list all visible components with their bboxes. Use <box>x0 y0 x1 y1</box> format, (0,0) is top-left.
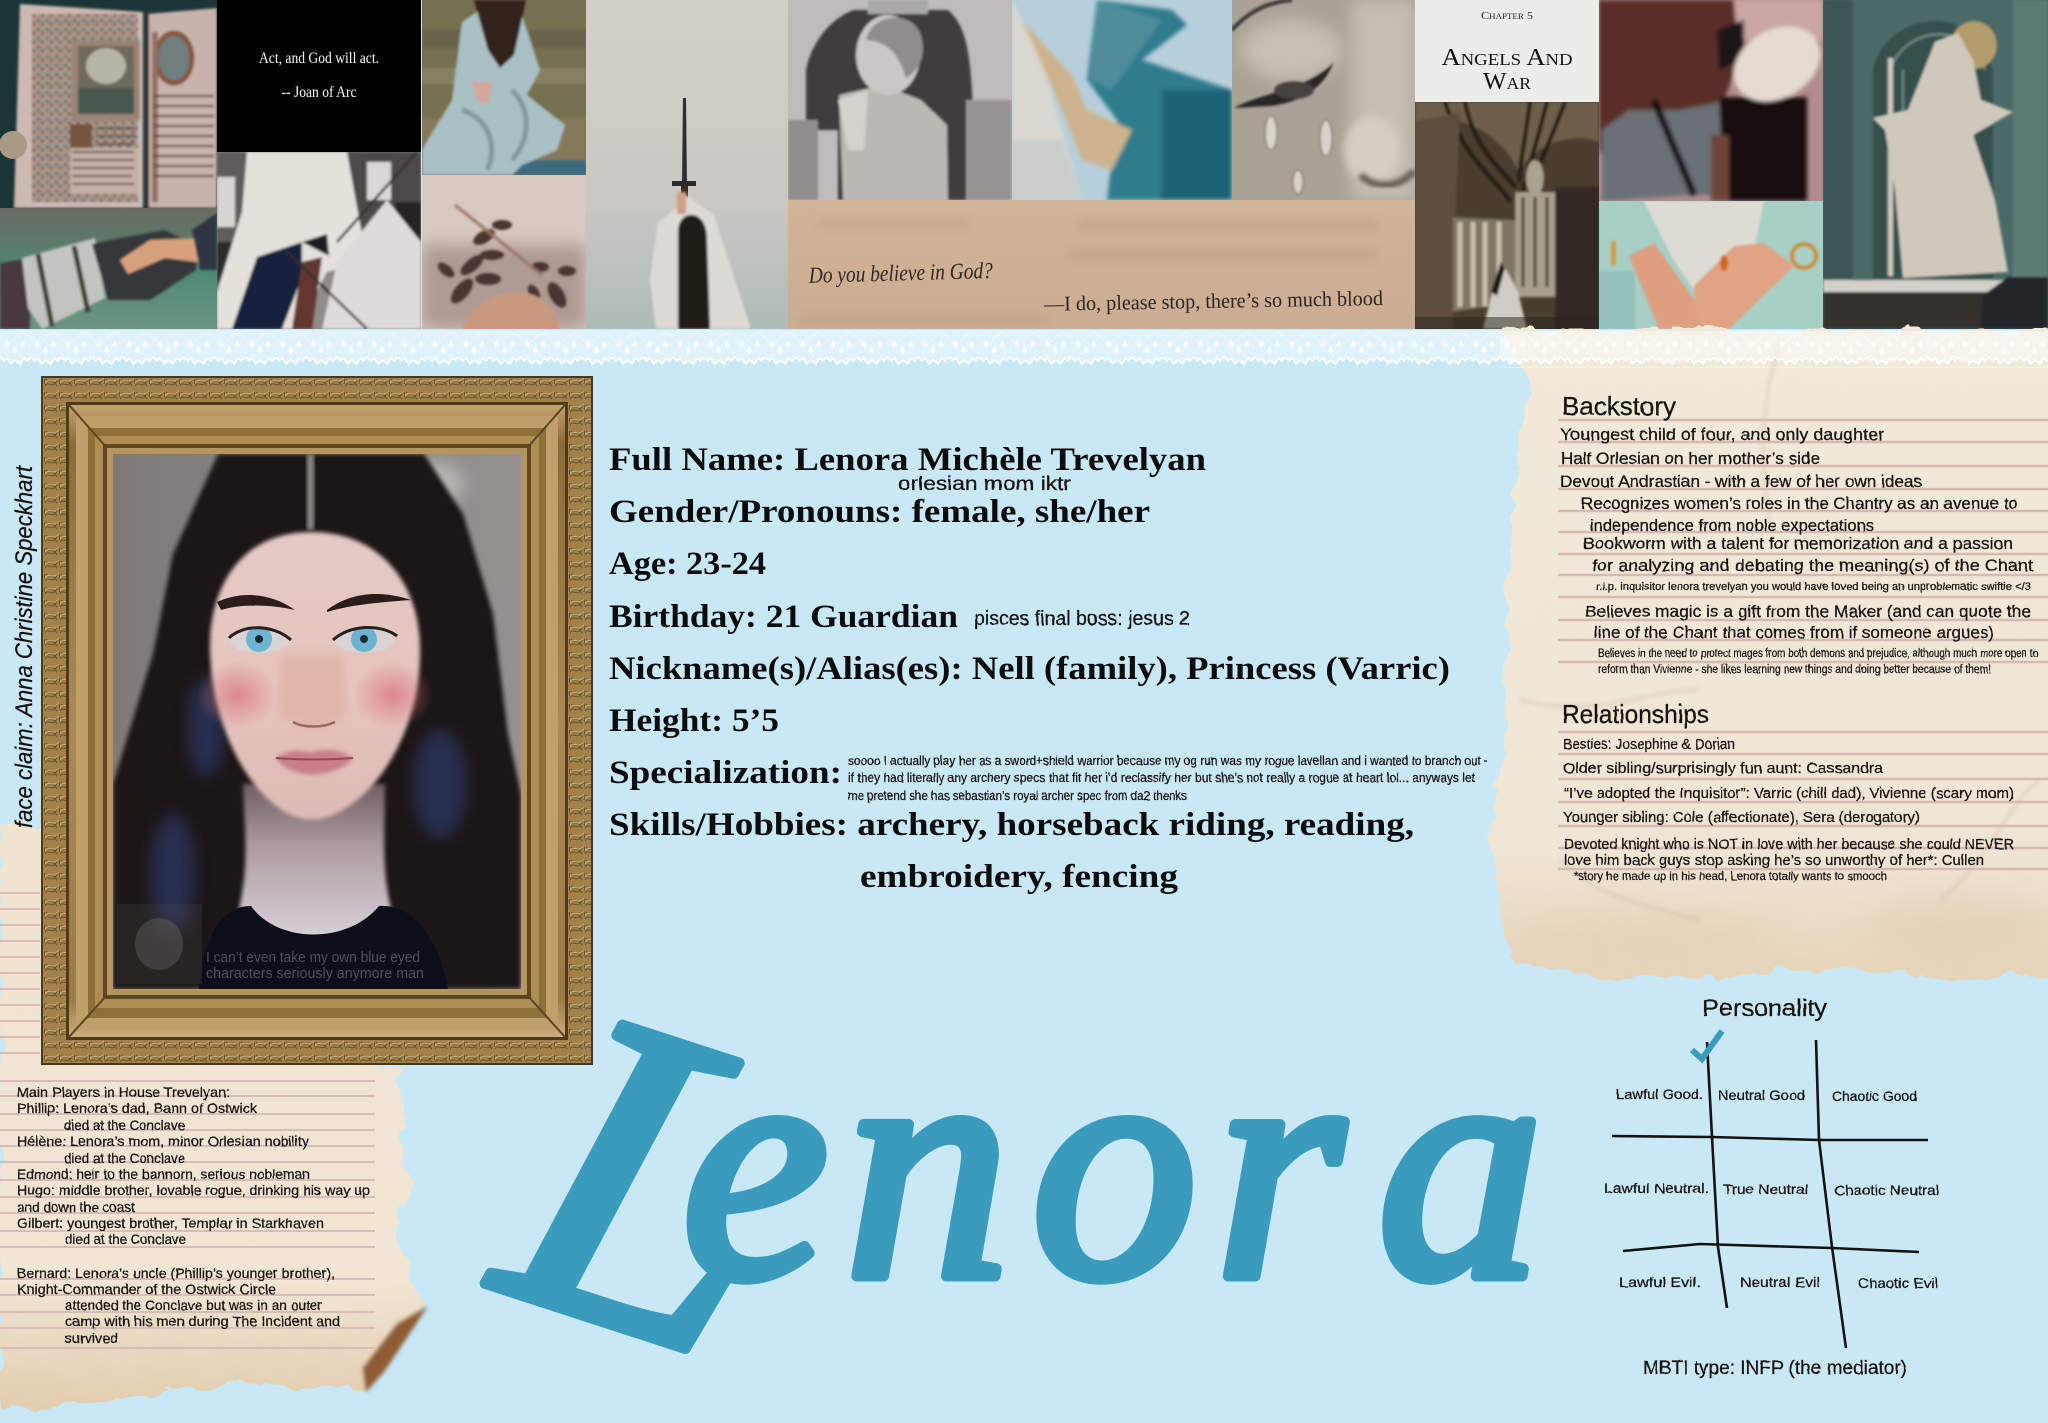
image: embroidery close-up <box>422 175 586 329</box>
image: black quote card <box>217 0 421 152</box>
text block: backstory lines <box>1560 425 2038 676</box>
side notes: soooo I actually play her as a sword+shield warrior because my og run was my rogue lavellan and i wanted to branch out - <box>848 753 1488 768</box>
text block: relationships lines: *story he made up in his head, Lenora totally wants to smooch <box>1574 869 1887 883</box>
text block: character details: Nickname(s)/Alias(es): Nell (family), Princess (Varric) <box>609 651 1450 687</box>
image: rider on white horse <box>217 152 421 329</box>
image: weeping face <box>1232 0 1415 200</box>
text block: backstory lines: Devout Andrastian - with a few of her own ideas <box>1560 472 1922 491</box>
alignment labels: Lawful Evil. <box>1619 1274 1701 1290</box>
text block: main players in House Trevelyan: died at the Conclave <box>64 1117 185 1133</box>
text block: character details: Height: 5’5 <box>609 703 779 739</box>
image: praying stone statue <box>788 0 1012 200</box>
text block: character details: Specialization: <box>609 755 842 791</box>
text block: main players in House Trevelyan <box>17 1084 370 1346</box>
side notes: if they had literally any archery specs that fit her i’d reclassify her but she’s not really a rogue at heart lol... anyways let <box>848 770 1475 785</box>
image: chapter title page: Chapter 5 <box>1481 10 1534 22</box>
portrait in gold frame <box>41 376 593 1065</box>
text block: main players in House Trevelyan: Gilbert: youngest brother, Templar in Starkhaven <box>17 1215 324 1231</box>
text block: backstory lines: Youngest child of four, and only daughter <box>1560 425 1884 444</box>
side notes: me pretend she has sebastian’s royal archer spec from da2 thenks <box>848 788 1187 803</box>
image: archer back view <box>1599 0 1823 201</box>
text block: relationships lines: Younger sibling: Cole (affectionate), Sera (derogatory) <box>1563 809 1920 826</box>
side notes <box>848 474 1488 803</box>
panel: backstory and relationships paper <box>1489 331 2048 980</box>
alignment labels: Chaotic Evil <box>1858 1275 1938 1291</box>
title: Lenora: enora <box>682 983 1543 1348</box>
moodboard collage <box>0 0 2048 392</box>
alignment labels: Chaotic Good <box>1832 1088 1917 1104</box>
text block: main players in House Trevelyan: Phillip: Lenora’s dad, Bann of Ostwick <box>17 1100 258 1116</box>
icon: check mark <box>1692 1031 1722 1059</box>
text block: character details: Birthday: 21 Guardian <box>609 599 958 635</box>
text block: main players in House Trevelyan: Knight-Commander of the Ostwick Circle <box>17 1281 276 1297</box>
alignment labels: True Neutral <box>1723 1181 1808 1197</box>
text block: character details: Gender/Pronouns: female, she/her <box>609 494 1150 530</box>
image: illuminated book <box>0 0 217 208</box>
text block: backstory lines: Bookworm with a talent for memorization and a passion <box>1583 534 2013 553</box>
text block: character details: embroidery, fencing <box>860 859 1179 895</box>
text block: character details: Age: 23-24 <box>609 546 766 582</box>
side notes: pisces final boss: jesus 2 <box>974 608 1190 630</box>
image: book page quote: —I do, please stop, there’s so much blood <box>1043 286 1384 316</box>
image: chapter title page: War <box>1483 69 1532 95</box>
image: black quote card: -- Joan of Arc <box>282 84 357 101</box>
text block: backstory lines: independence from noble expectations <box>1590 516 1874 535</box>
text block: main players in House Trevelyan: attended the Conclave but was in an outer <box>65 1297 322 1313</box>
text block: main players in House Trevelyan: died at the Conclave <box>64 1150 185 1166</box>
text block: backstory lines: for analyzing and debating the meaning(s) of the Chant <box>1592 556 2033 575</box>
alignment labels: Neutral Good <box>1718 1087 1805 1103</box>
alignment labels: Chaotic Neutral <box>1834 1182 1939 1198</box>
photo: dark-haired woman with blue eyes <box>113 454 521 989</box>
text block: backstory lines: Half Orlesian on her mother’s side <box>1561 449 1820 468</box>
image: chapter title page: Angels And <box>1442 45 1572 71</box>
alignment labels <box>1604 1086 1939 1291</box>
lace trim <box>0 330 2048 367</box>
photo: dark-haired woman with blue eyes: characters seriously anymore man <box>206 965 424 982</box>
text block: backstory lines: line of the Chant that comes from if someone argues) <box>1594 623 1994 642</box>
text block: main players in House Trevelyan: Edmond: heir to the bannorn, serious nobleman <box>17 1166 310 1182</box>
text block: main players in House Trevelyan: Hugo: middle brother, lovable rogue, drinking his way up <box>17 1182 370 1198</box>
gold frame <box>41 376 593 1065</box>
text block: main players in House Trevelyan: Hélène: Lenora’s mom, minor Orlesian nobility <box>17 1133 309 1149</box>
image: hands with rings <box>1599 201 1823 329</box>
image: white veiled statue <box>1823 0 2048 329</box>
alignment labels: Neutral Evil <box>1740 1274 1820 1290</box>
image: chapter title page <box>1415 0 1599 102</box>
text block: relationships lines: “I’ve adopted the Inquisitor”: Varric (chill dad), Vivienne (scary mom) <box>1564 785 2014 802</box>
text block: relationships lines: Devoted knight who is NOT in love with her because she could NEVER <box>1564 836 2014 853</box>
text block: main players in House Trevelyan: camp with his men during The Incident and <box>65 1313 340 1329</box>
image: seated woman in pale dress <box>422 0 586 175</box>
text block: relationships lines: Besties: Josephine & Dorian <box>1563 736 1735 753</box>
panel: main players paper <box>0 826 428 1408</box>
text block: backstory lines: Recognizes women’s roles in the Chantry as an avenue to <box>1581 494 2018 513</box>
alignment labels: Lawful Good. <box>1616 1086 1703 1102</box>
image: book page quote: Do you believe in God? <box>808 258 994 288</box>
text block: main players in House Trevelyan: Bernard: Lenora’s uncle (Phillip’s younger brother), <box>17 1265 335 1281</box>
alignment labels: Lawful Neutral. <box>1604 1180 1709 1196</box>
heading: Relationships: Relationships <box>1562 699 1709 729</box>
text block: main players in House Trevelyan: Main Players in House Trevelyan: <box>17 1084 230 1100</box>
grid lines <box>1612 1040 1928 1348</box>
image: gloved hands <box>0 208 217 329</box>
text block: main players in House Trevelyan: died at the Conclave <box>65 1231 186 1247</box>
side notes: orlesian mom iktr <box>898 474 1072 495</box>
text block: backstory lines: reform than Vivienne - she likes learning new things and doing better because of them! <box>1598 664 1991 676</box>
text block: main players in House Trevelyan: and down the coast <box>17 1199 135 1215</box>
photo: dark-haired woman with blue eyes: I can’t even take my own blue eyed <box>206 949 420 966</box>
text block: relationships lines <box>1563 736 2014 883</box>
text block: relationships lines: Older sibling/surprisingly fun aunt: Cassandra <box>1563 760 1884 777</box>
text block: backstory lines: r.i.p. inquisitor lenora trevelyan you would have loved being an unproblematic swiftie </3 <box>1596 581 2031 593</box>
image: book page quote <box>788 200 1415 329</box>
image: rider in teal dress <box>1012 0 1232 200</box>
text block: character details: Full Name: Lenora Michèle Trevelyan <box>609 442 1206 478</box>
panel: personality alignment chart <box>1604 995 1939 1379</box>
image: black quote card: Act, and God will act. <box>259 50 379 67</box>
caption: face claim: face claim: Anna Christine Speckhart <box>11 465 38 828</box>
heading: Personality: Personality <box>1702 995 1827 1022</box>
text block: main players in House Trevelyan: survived <box>65 1330 118 1346</box>
image: raised sword <box>586 0 788 329</box>
text block: character details <box>609 442 1450 895</box>
text block: character details: Skills/Hobbies: archery, horseback riding, reading, <box>609 807 1414 843</box>
text block: backstory lines: Believes magic is a gift from the Maker (and can quote the <box>1585 602 2031 621</box>
text: MBTI type: MBTI type: INFP (the mediator) <box>1643 1358 1907 1379</box>
text block: relationships lines: love him back guys stop asking he’s so unworthy of her*: Cullen <box>1564 852 1984 869</box>
heading: Backstory: Backstory <box>1562 391 1676 421</box>
image: cathedral cloister <box>1415 102 1599 329</box>
